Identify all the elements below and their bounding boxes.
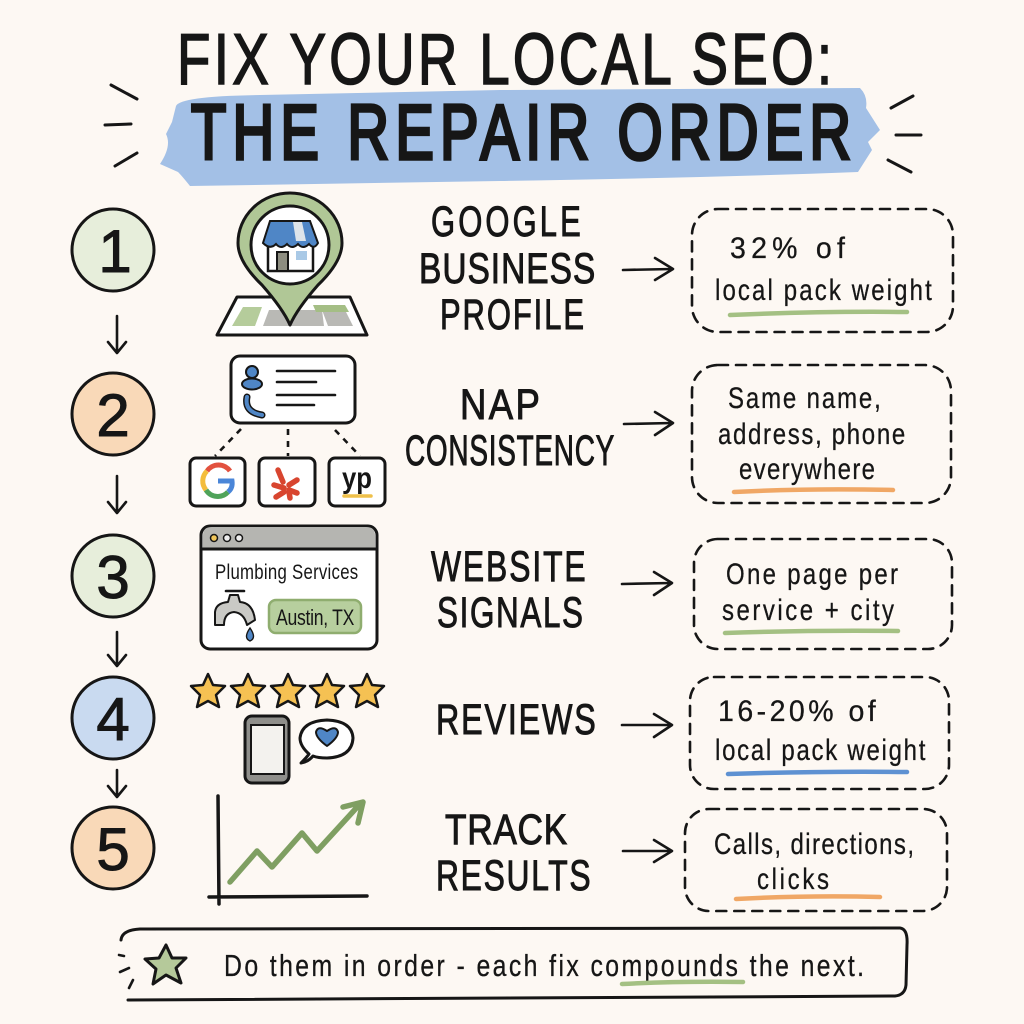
callout 1 (692, 209, 953, 332)
callout 2: everywhere (739, 451, 875, 486)
label: Google Business Profile: PROFILE (440, 290, 584, 338)
label: Google Business Profile: BUSINESS (419, 245, 595, 293)
callout 2: Same name, (728, 380, 881, 415)
label: Website Signals (431, 543, 586, 636)
icon: YP tile: yp (342, 462, 372, 495)
callout 3: One page per (726, 556, 898, 591)
callout 3: service + city (722, 592, 894, 627)
icon: YP tile (329, 458, 385, 506)
footer banner (119, 928, 907, 1000)
callout 5 (685, 809, 947, 911)
step 1 number (72, 209, 154, 291)
icon: Yelp tile (259, 458, 315, 506)
label: Google Business Profile (419, 197, 595, 338)
arrow to callout 3 (622, 572, 672, 595)
title line 2: THE REPAIR ORDER (191, 89, 851, 176)
icon: phone and heart bubble (245, 716, 353, 783)
callout 1: 32% of (730, 232, 846, 265)
arrow to callout 5 (623, 840, 672, 862)
icon: contact card with listings (190, 356, 385, 506)
arrow to callout 2 (624, 412, 673, 435)
step 3 number (72, 535, 154, 617)
arrow 1 to 2 (108, 316, 126, 353)
icon: growth chart (209, 796, 367, 904)
callout 5: Calls, directions, (714, 826, 914, 861)
callout 4 (690, 677, 949, 789)
accent marks left (105, 85, 137, 166)
step 4 number (72, 677, 154, 759)
footer text: Do them in order - each fix compounds the next. (224, 948, 864, 983)
arrow 4 to 5 (108, 770, 126, 797)
callout 4: 16-20% of (718, 695, 877, 728)
icon: Google tile (190, 458, 245, 506)
icon: browser window (201, 526, 377, 649)
step 5 number: 5 (96, 816, 130, 883)
callout 5: clicks (757, 861, 829, 896)
title (105, 19, 880, 186)
label: Track Results (436, 806, 591, 900)
callout 2 (692, 365, 951, 503)
callout 2: address, phone (718, 416, 905, 451)
icon: browser window: Austin, TX (276, 606, 354, 631)
label: Google Business Profile: GOOGLE (431, 197, 581, 245)
accent marks right (888, 96, 921, 172)
step 2 number (72, 373, 154, 455)
label: NAP Consistency: CONSISTENCY (405, 426, 614, 474)
icon: map pin with storefront (217, 193, 367, 335)
label: Website Signals: WEBSITE (431, 543, 586, 591)
step 1 number: 1 (98, 218, 132, 285)
arrow to callout 4 (622, 714, 672, 737)
title line 1: FIX YOUR LOCAL SEO: (177, 19, 832, 100)
icon: browser window: Plumbing Services (215, 561, 358, 585)
step 2 number: 2 (96, 382, 130, 449)
icon: star (145, 945, 186, 984)
arrow 3 to 4 (108, 632, 126, 666)
arrow 2 to 3 (108, 476, 126, 513)
step 5 number (72, 807, 154, 889)
label: Track Results: RESULTS (436, 852, 591, 900)
callout 3 (694, 539, 952, 649)
label: Track Results: TRACK (445, 806, 567, 854)
arrow to callout 1 (623, 258, 673, 280)
icon: five stars (191, 674, 384, 707)
step 3 number: 3 (96, 544, 130, 611)
callout 1: local pack weight (715, 272, 932, 307)
label: NAP Consistency: NAP (460, 381, 540, 429)
label: NAP Consistency (405, 381, 614, 474)
callout 4: local pack weight (715, 732, 926, 767)
label: Reviews: REVIEWS (436, 697, 596, 744)
step 4 number: 4 (96, 686, 130, 753)
title highlight brush stroke (160, 88, 880, 186)
label: Website Signals: SIGNALS (437, 588, 583, 636)
